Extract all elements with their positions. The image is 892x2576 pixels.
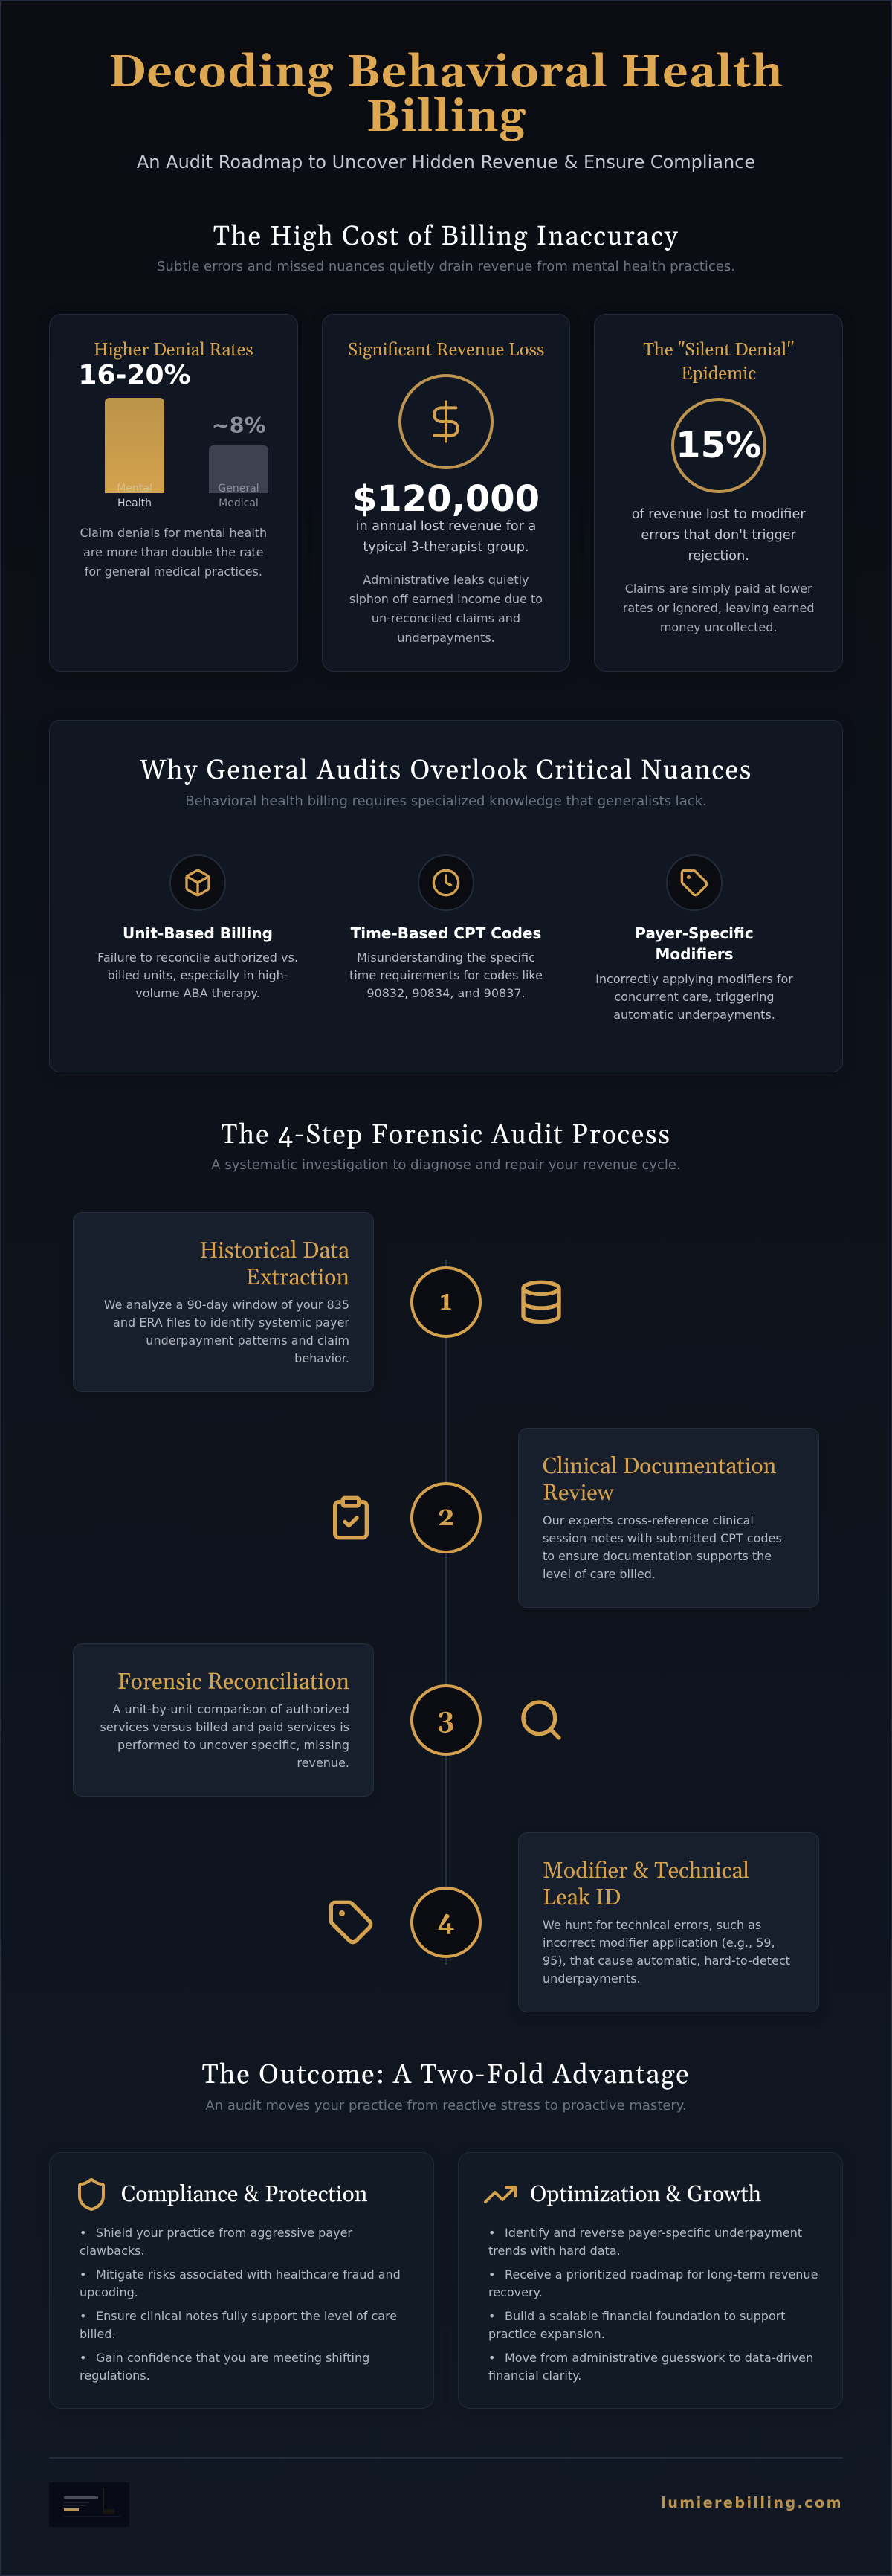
column text bbox=[97, 950, 298, 999]
step 1 card bbox=[73, 1212, 374, 1392]
benefit list: Shield your practice from aggressive payer bbox=[96, 2226, 352, 2240]
card heading: The "Silent Denial" bbox=[643, 339, 794, 361]
step 1 text: behavior. bbox=[294, 1350, 349, 1365]
panel: higher denial rates bbox=[49, 314, 298, 672]
card heading: Epidemic bbox=[681, 363, 756, 385]
panel: optimization and growth bbox=[458, 2152, 843, 2409]
footer rule bbox=[49, 2457, 843, 2459]
benefit list: Ensure clinical notes fully support the level of care bbox=[96, 2309, 397, 2323]
card description: underpayments. bbox=[397, 631, 495, 644]
icon: tag bbox=[666, 854, 723, 911]
step 4 text: underpayments. bbox=[543, 1971, 641, 1986]
bar: general medical bbox=[209, 445, 268, 493]
step 2 heading: Clinical Documentation bbox=[543, 1453, 776, 1481]
section subheading: high cost: Subtle errors and missed nuances quietly drain revenue from mental health practices. bbox=[157, 259, 735, 274]
step 3 text bbox=[100, 1701, 349, 1770]
step 2 card bbox=[518, 1428, 819, 1608]
value caption: errors that don't trigger bbox=[641, 528, 796, 543]
column text: Incorrectly applying modifiers for bbox=[595, 971, 793, 986]
section heading: audit process: The 4-Step Forensic Audit Process bbox=[221, 1119, 671, 1153]
step 4 text: incorrect modifier application (e.g., 59, bbox=[543, 1935, 775, 1950]
bar label: mental health bbox=[117, 483, 152, 509]
step 3 text: A unit-by-unit comparison of authorized bbox=[112, 1701, 349, 1716]
bar label: general medical: Medical bbox=[219, 498, 259, 509]
panel: compliance and protection bbox=[49, 2152, 434, 2409]
benefit list: upcoding. bbox=[80, 2285, 138, 2299]
value caption: typical 3-therapist group. bbox=[363, 540, 529, 555]
panel: significant revenue loss bbox=[322, 314, 570, 672]
step 1 heading bbox=[200, 1237, 349, 1292]
step 4 text: 95), that cause automatic, hard-to-detect bbox=[543, 1953, 790, 1968]
column text: Failure to reconcile authorized vs. bbox=[97, 950, 298, 964]
step 4 text bbox=[543, 1917, 790, 1986]
card description: Claims are simply paid at lower bbox=[625, 582, 812, 595]
panel heading: Why General Audits Overlook Critical Nuances bbox=[140, 755, 752, 788]
step 3 text: revenue. bbox=[297, 1755, 349, 1770]
step 1 text: and ERA files to identify systemic payer bbox=[113, 1315, 349, 1330]
panel: silent denial epidemic bbox=[594, 314, 843, 672]
bar label: general medical bbox=[218, 483, 259, 509]
step 1 number bbox=[410, 1266, 482, 1338]
value: mental health rate: 16-20% bbox=[78, 360, 191, 390]
column heading: Payer-Specific bbox=[635, 924, 754, 942]
value caption: of revenue lost to modifier bbox=[632, 507, 806, 522]
card description: Administrative leaks quietly bbox=[363, 573, 529, 586]
benefit list: Mitigate risks associated with healthcare fraud and bbox=[96, 2267, 401, 2282]
card description: are more than double the rate bbox=[83, 544, 264, 559]
step 3 text: performed to uncover specific, missing bbox=[117, 1737, 349, 1752]
section subheading: outcome: An audit moves your practice from reactive stress to proactive mastery. bbox=[205, 2098, 687, 2113]
benefit list: Move from administrative guesswork to data-driven bbox=[505, 2351, 813, 2365]
icon: trending up bbox=[483, 2185, 517, 2204]
step 1 text bbox=[104, 1297, 349, 1365]
step 2 heading: Review bbox=[543, 1480, 614, 1508]
column: unit-based billing bbox=[97, 854, 298, 999]
column text bbox=[595, 971, 793, 1022]
value ring: 15 percent: 15% bbox=[676, 425, 761, 466]
card description: rates or ignored, leaving earned bbox=[623, 601, 815, 614]
benefit list: Build a scalable financial foundation to support bbox=[505, 2309, 786, 2323]
card description: un-reconciled claims and bbox=[372, 611, 520, 625]
step 1 text: underpayment patterns and claim bbox=[146, 1333, 349, 1347]
benefit list: • bbox=[80, 2226, 86, 2240]
footer website: lumierebilling.com bbox=[661, 2494, 843, 2511]
timeline spine bbox=[445, 1260, 447, 1965]
column text: time requirements for codes like bbox=[349, 968, 543, 982]
benefit list: • bbox=[488, 2267, 495, 2282]
step 2 number bbox=[410, 1482, 482, 1553]
step 1 heading: Historical Data bbox=[200, 1237, 349, 1266]
benefit list: Gain confidence that you are meeting shifting bbox=[96, 2351, 369, 2365]
section heading: high cost: The High Cost of Billing Inaccuracy bbox=[213, 221, 679, 254]
benefit list bbox=[488, 2226, 818, 2383]
column heading: Modifiers bbox=[656, 945, 733, 963]
title: Decoding Behavioral Health bbox=[109, 45, 783, 102]
step 1 number: 1 bbox=[439, 1285, 453, 1319]
benefit list: regulations. bbox=[80, 2369, 150, 2383]
panel heading: Optimization & Growth bbox=[530, 2180, 761, 2209]
step 3 number bbox=[410, 1684, 482, 1756]
value caption bbox=[356, 519, 536, 555]
icon: tag bbox=[329, 1901, 373, 1944]
step 2 text bbox=[543, 1513, 782, 1581]
step 1 text: We analyze a 90-day window of your 835 bbox=[104, 1297, 349, 1312]
column text: billed units, especially in high- bbox=[107, 968, 288, 982]
icon: clock bbox=[418, 854, 474, 911]
step 4 text: We hunt for technical errors, such as bbox=[543, 1917, 761, 1932]
step 4 number: 4 bbox=[437, 1905, 455, 1939]
step 2 text: level of care billed. bbox=[543, 1566, 656, 1581]
benefit list: Identify and reverse payer-specific underpayment bbox=[505, 2226, 802, 2240]
step 4 heading bbox=[543, 1858, 749, 1913]
card description bbox=[623, 582, 815, 634]
icon: search bbox=[521, 1700, 561, 1740]
card description bbox=[80, 525, 267, 579]
benefit list: • bbox=[488, 2309, 495, 2323]
step 1 heading: Extraction bbox=[246, 1264, 349, 1292]
step 3 heading: Forensic Reconciliation bbox=[117, 1669, 349, 1697]
card heading: Significant Revenue Loss bbox=[348, 339, 544, 361]
column text: automatic underpayments. bbox=[613, 1007, 775, 1022]
step 3 card bbox=[73, 1643, 374, 1797]
benefit list: financial clarity. bbox=[488, 2369, 581, 2383]
card description: money uncollected. bbox=[660, 620, 777, 634]
column text bbox=[349, 950, 543, 999]
benefit list: • bbox=[80, 2267, 86, 2282]
column text: 90832, 90834, and 90837. bbox=[366, 986, 526, 999]
title bbox=[109, 45, 783, 146]
benefit list: practice expansion. bbox=[488, 2327, 605, 2341]
bar label: mental health: Health bbox=[117, 498, 152, 509]
column heading bbox=[635, 924, 754, 963]
icon: shield bbox=[78, 2178, 105, 2211]
value: annual loss: $120,000 bbox=[352, 477, 540, 519]
card description: siphon off earned income due to bbox=[349, 592, 543, 605]
column heading: Unit-Based Billing bbox=[123, 924, 273, 942]
step 4 card bbox=[518, 1832, 819, 2012]
value: general medical rate: ~8% bbox=[211, 413, 266, 438]
value ring: 15 percent bbox=[671, 398, 766, 493]
benefit list: • bbox=[80, 2351, 86, 2365]
step 4 heading: Modifier & Technical bbox=[543, 1858, 749, 1886]
panel: why general audits overlook nuances bbox=[49, 720, 843, 1072]
benefit list: • bbox=[488, 2351, 495, 2365]
icon: dollar in ring bbox=[398, 374, 494, 469]
benefit list: trends with hard data. bbox=[488, 2244, 621, 2258]
bar label: mental health: Mental bbox=[117, 483, 152, 495]
bar label: general medical: General bbox=[218, 483, 259, 495]
column text: Misunderstanding the specific bbox=[357, 950, 535, 964]
card heading bbox=[643, 339, 794, 385]
step 2 text: to ensure documentation supports the bbox=[543, 1548, 772, 1563]
value caption: in annual lost revenue for a bbox=[356, 519, 536, 534]
icon: database bbox=[521, 1281, 561, 1324]
footer thumbnail bbox=[49, 2482, 129, 2527]
icon: box bbox=[169, 854, 226, 911]
value caption: rejection. bbox=[688, 549, 749, 564]
column heading: Time-Based CPT Codes bbox=[351, 924, 541, 942]
section subheading: audit process: A systematic investigation to diagnose and repair your revenue cycle. bbox=[211, 1157, 681, 1173]
card description: for general medical practices. bbox=[85, 564, 262, 579]
panel subheading: Behavioral health billing requires specialized knowledge that generalists lack. bbox=[185, 793, 707, 809]
column: time-based CPT codes bbox=[349, 854, 543, 999]
benefit list: Receive a prioritized roadmap for long-term revenue bbox=[505, 2267, 818, 2282]
step 4 number bbox=[410, 1887, 482, 1958]
panel heading: Compliance & Protection bbox=[121, 2180, 367, 2209]
title: Billing bbox=[366, 89, 526, 146]
step 2 text: Our experts cross-reference clinical bbox=[543, 1513, 754, 1527]
card heading: Higher Denial Rates bbox=[94, 339, 253, 361]
icon: clipboard check bbox=[333, 1496, 369, 1539]
card description: Claim denials for mental health bbox=[80, 525, 267, 540]
step 2 heading bbox=[543, 1453, 776, 1508]
step 2 text: session notes with submitted CPT codes bbox=[543, 1530, 782, 1545]
step 3 number: 3 bbox=[438, 1703, 454, 1737]
benefit list: recovery. bbox=[488, 2285, 543, 2299]
column text: concurrent care, triggering bbox=[614, 989, 775, 1004]
benefit list: • bbox=[488, 2226, 495, 2240]
benefit list: clawbacks. bbox=[80, 2244, 145, 2258]
step 3 text: services versus billed and paid services is bbox=[100, 1719, 349, 1734]
bar: mental health bbox=[105, 398, 164, 493]
column text: volume ABA therapy. bbox=[135, 986, 260, 999]
step 2 number: 2 bbox=[438, 1501, 454, 1535]
subtitle: An Audit Roadmap to Uncover Hidden Revenue & Ensure Compliance bbox=[137, 152, 755, 173]
benefit list: billed. bbox=[80, 2327, 116, 2341]
step 4 heading: Leak ID bbox=[543, 1884, 621, 1913]
section heading: outcome: The Outcome: A Two-Fold Advantage bbox=[201, 2059, 690, 2093]
column: payer-specific modifiers bbox=[595, 854, 793, 1022]
benefit list bbox=[80, 2226, 401, 2383]
card description bbox=[349, 573, 543, 644]
value caption bbox=[632, 507, 806, 564]
benefit list: • bbox=[80, 2309, 86, 2323]
